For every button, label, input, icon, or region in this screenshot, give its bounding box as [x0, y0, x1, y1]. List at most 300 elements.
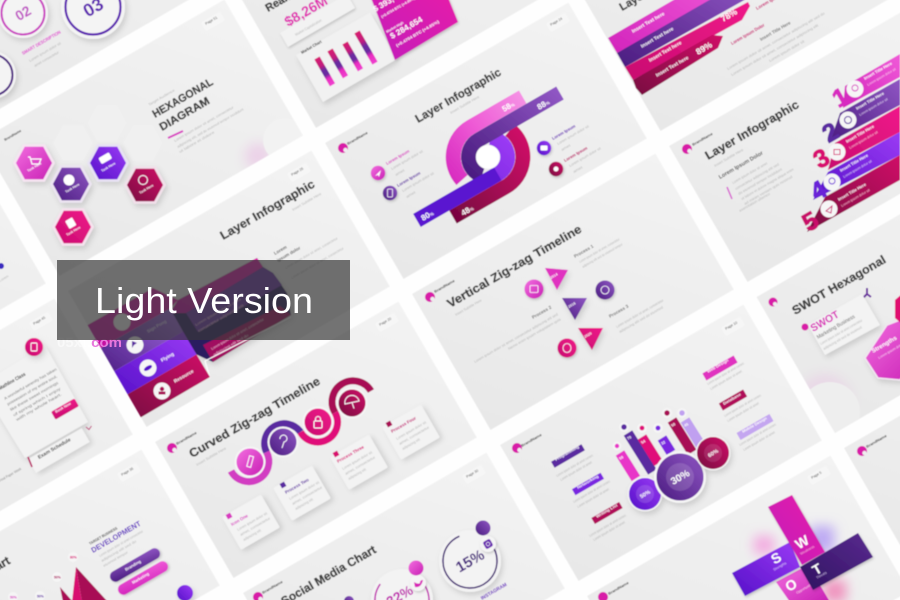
card: process two: Lorem ipsum dolor sit	[288, 480, 320, 501]
band 3: Insert Title Here	[845, 123, 875, 144]
process 2: Lorem ipsum dolor sit amet, consectetur adipiscing elit sed	[474, 312, 559, 364]
pill: branding: Branding	[124, 558, 142, 572]
band 5: 5	[797, 206, 824, 237]
layer arrows: Insert Text here	[648, 40, 683, 64]
icon: pink circle	[524, 280, 544, 298]
section text: consectetur adipiscing elit sed	[734, 162, 780, 191]
bar chart: 32	[660, 440, 666, 446]
card: process three: amet, consectetur	[344, 455, 377, 476]
ring decoration	[799, 374, 860, 442]
stat card: Market Capitalization	[294, 18, 322, 37]
page label	[117, 463, 141, 482]
heading: DIAGRAM	[158, 95, 212, 134]
row: flying	[140, 351, 175, 376]
corner circle	[243, 141, 268, 166]
label: networking: Networking	[576, 474, 600, 490]
title: Vertical Zig-zag Timeline	[444, 222, 584, 311]
title: Curved Zig-zag Timeline	[186, 374, 323, 461]
logo	[857, 434, 887, 456]
exam schedule card	[28, 428, 90, 473]
panel: central layer infographic slide	[325, 2, 647, 279]
card: icon one	[222, 494, 280, 550]
circle 30%: 30%	[669, 468, 692, 488]
card: icon one: Icon One	[230, 513, 249, 527]
text block: ipsum dolor	[276, 245, 301, 263]
label: web design: Web Design	[706, 358, 730, 374]
left legend: Lorem ipsum dolor sit	[402, 171, 435, 193]
band 4: 4	[805, 175, 832, 206]
logo	[768, 298, 778, 306]
circle 60%: 60%	[707, 448, 720, 459]
right legend: amet	[560, 143, 571, 152]
page label	[287, 163, 311, 182]
hexagon: next	[895, 294, 900, 324]
magenta price card: Market High	[386, 21, 404, 34]
card: icon one: amet, consectetur	[240, 516, 272, 537]
panel: swot cross slide	[587, 456, 900, 600]
card: process four: adipiscing elit	[402, 437, 421, 451]
layer arrows: 78%	[719, 6, 739, 24]
side text: Lorem Ipsum Dolor	[730, 22, 766, 46]
label: database: Lorem ipsum dolor sit amet consec	[724, 393, 762, 418]
stacked shape	[84, 258, 291, 419]
logo: BrandName	[4, 129, 22, 142]
hexagon: clock	[126, 168, 164, 202]
panel: swot hexagonal slide	[756, 156, 900, 442]
card: icon one: Lorem ipsum dolor sit	[236, 511, 268, 532]
page label	[807, 466, 831, 485]
card: process four: Lorem ipsum dolor sit	[396, 420, 427, 441]
class card: like these sweet mornings	[10, 381, 59, 412]
ring values: 48%	[460, 203, 475, 218]
process 3: adipiscing elit sed do eiusmod	[618, 305, 664, 334]
logo	[598, 581, 629, 600]
row: resource: Resource	[173, 368, 195, 385]
label: web design	[702, 356, 745, 391]
title: Layer Infographic	[218, 177, 317, 243]
logo: BrandName	[866, 434, 887, 449]
subtitle: Insert Subtitle Here	[292, 192, 322, 212]
label: writing list: Lorem ipsum dolor sit amet consec	[588, 513, 627, 538]
card: process three: adipiscing elit	[348, 467, 367, 481]
text block: Lorem ipsum dolor sit amet, consectetur	[284, 236, 339, 270]
circle left	[0, 51, 16, 99]
triangle 2014	[545, 268, 568, 290]
section text: Lorem Ipsum Dolor	[718, 150, 765, 181]
logo: BrandName	[176, 431, 197, 446]
hexagon: cart: Task Here	[26, 161, 42, 173]
page label: Page 5	[810, 471, 822, 480]
card: process four	[382, 404, 440, 460]
band 5: Insert Title Here	[837, 181, 867, 202]
smart description text: SMART DESCRIPTION	[21, 29, 62, 56]
hexagon: strengths	[865, 318, 900, 380]
page label: Page 51	[204, 16, 218, 26]
icon: crimson circle	[558, 338, 576, 358]
label: networking: Lorem ipsum dolor sit amet	[576, 487, 610, 509]
pyramids	[60, 567, 108, 600]
description: ut labore et dolore	[178, 130, 215, 154]
label: networking: Lorem ipsum dolor sit amet consec	[572, 479, 611, 504]
card: process three: Lorem ipsum dolor sit	[342, 450, 373, 471]
chevron	[86, 426, 92, 430]
logo	[425, 279, 455, 302]
panel caption: Lorem ipsum dolor sit amet, consectetur	[210, 317, 265, 351]
icon: purple mark	[863, 288, 871, 298]
glows	[754, 526, 846, 600]
swot card: adipiscing elit sed do eiusmod	[822, 325, 863, 351]
text block: Lorem ipsum dolor sit amet, consectetur	[290, 246, 345, 280]
right legend: Lorem Ipsum	[551, 123, 577, 141]
pill: branding	[108, 546, 162, 584]
logo: BrandName	[262, 580, 283, 595]
band 3: Lorem ipsum dolor sit	[848, 130, 879, 150]
market chart card: Market Chart	[300, 39, 323, 55]
subtitle: Insert Subtitle Here	[714, 148, 744, 168]
label: writing list: Lorem ipsum dolor sit amet	[592, 520, 626, 542]
swot band: strengths	[732, 542, 800, 596]
label: web design: Lorem ipsum dolor sit amet	[710, 369, 743, 391]
side text: Insert Title Here	[759, 20, 792, 42]
band 4: Insert Title Here	[839, 152, 869, 173]
logo: BrandName	[434, 279, 455, 294]
ball	[177, 585, 193, 600]
left legend: Lorem Ipsum	[385, 148, 411, 166]
icon: purple circle	[596, 280, 614, 300]
page label	[721, 317, 745, 336]
ring values: 88%	[536, 97, 551, 112]
card: process four: Process Four	[390, 415, 417, 434]
instagram gauge: 15%	[453, 547, 488, 576]
panel: blank branded slide	[844, 308, 900, 584]
triangle 2020	[578, 328, 603, 350]
circle 30%	[654, 451, 706, 503]
panel: numbered circles slide	[0, 0, 188, 109]
logo	[512, 433, 542, 453]
circle 60%	[696, 436, 730, 470]
swot band: strengths: S	[768, 549, 784, 567]
page label: Page 20	[378, 317, 392, 327]
class card: with my whole heart.	[16, 392, 63, 422]
panel: curved zig-zag timeline slide	[155, 302, 477, 578]
band 3	[808, 106, 900, 174]
label: mobile design	[737, 414, 777, 452]
band 2	[817, 79, 900, 148]
process 1: adipiscing elit sed do eiusmod tempor	[582, 242, 624, 269]
hexagon: strengths: Strengths	[871, 335, 899, 355]
section text: ad minim veniam quis nostrud	[744, 175, 793, 206]
page label	[29, 312, 53, 331]
step 1 icon	[234, 446, 266, 478]
market chart card	[296, 12, 397, 102]
panel caption: consectetur adipiscing elit	[198, 303, 245, 333]
panel: hexagonal diagram slide	[0, 0, 307, 276]
button: Book Now	[54, 402, 72, 414]
magenta price card	[368, 0, 458, 60]
section text: exercitation ullamco	[738, 192, 771, 213]
triangle 2020: 2020	[584, 331, 592, 339]
panel: development chart slide	[0, 450, 220, 600]
panel: numbered layer infographic slide	[669, 6, 900, 282]
right legend: Lorem Ipsum	[563, 145, 589, 163]
swot band: weaknesses	[768, 495, 825, 565]
class card: possession of my entire soul,	[6, 374, 58, 406]
description: Lorem ipsum dolor sit amet, consectetur	[174, 105, 235, 143]
section text: Lorem ipsum dolor sit amet	[732, 161, 768, 185]
pyramid values: 50%	[10, 596, 17, 600]
pyramid values: 50%	[54, 576, 61, 580]
panel: layer infographic stack slide	[68, 150, 390, 427]
band 3: 3	[808, 143, 835, 174]
logo: BrandName	[692, 132, 713, 147]
section text: do eiusmod tempor incididunt	[738, 167, 783, 196]
circle 02	[0, 0, 48, 38]
pyramid values	[8, 552, 78, 600]
label: database: Lorem ipsum dolor sit amet	[726, 401, 760, 423]
stat card	[280, 0, 355, 47]
text block: Lorem	[273, 245, 288, 256]
label: database: Database	[722, 392, 742, 406]
side text	[726, 0, 825, 77]
band 5	[797, 155, 900, 237]
heading: eiusmod tempor	[102, 550, 129, 568]
panel: arrow layers slide	[582, 0, 900, 131]
circle 02: 02	[12, 2, 34, 24]
pyramid values: 50%	[37, 594, 44, 598]
pill: marketing	[116, 559, 170, 597]
card: process two: amet, consectetur	[292, 485, 324, 506]
banner: light version	[57, 260, 350, 340]
icon card	[0, 262, 8, 282]
ring values: 58%	[500, 99, 516, 114]
smart description text: amet consectetur	[34, 50, 60, 68]
triangle 2016: 2016	[568, 301, 576, 309]
bar chart: 59	[618, 455, 624, 461]
accent line	[727, 187, 732, 199]
step 2 icon	[268, 426, 298, 458]
step 4 icon	[336, 388, 368, 418]
bar chart: 54	[640, 439, 647, 445]
label: web design: Lorem ipsum dolor sit amet consec	[706, 361, 745, 386]
swot band: opportunities: Opportunity	[796, 582, 813, 595]
page label: Page 36	[120, 467, 134, 477]
left legend: amet	[394, 168, 405, 177]
process 2: Nemo enim ipsam voluptatem quia	[508, 317, 561, 351]
right legend: Lorem ipsum dolor sit	[568, 146, 602, 168]
hexagon: chat: Task Here	[100, 161, 116, 173]
swot band: weaknesses: Weakness	[800, 544, 815, 556]
left legend: Lorem Ipsum	[396, 170, 422, 188]
heading: Lorem ipsum dolor sit amet consectetur	[98, 529, 144, 558]
page label: Page 10	[724, 321, 738, 331]
text block	[273, 236, 345, 280]
swot band: threats: T	[809, 560, 825, 578]
panel: data chart slide	[500, 304, 822, 581]
process 3: Process 3	[608, 303, 630, 319]
accent line	[168, 131, 183, 138]
class card: of spring which I enjoy	[12, 387, 61, 417]
swot card	[802, 294, 880, 355]
band 4: Lorem ipsum dolor sit	[842, 159, 873, 179]
label: database	[719, 390, 762, 423]
title: SWOT Hexagonal	[790, 252, 888, 318]
hexagon: pie	[52, 166, 90, 202]
layer arrows: Insert Text here	[655, 55, 690, 79]
subtitle: Insert Subtitle Here	[450, 95, 480, 115]
card: icon one: adipiscing elit	[242, 528, 262, 542]
left legend	[371, 148, 435, 200]
label: mobile design: Lorem ipsum dolor sit amet	[742, 430, 776, 452]
magenta price card: (+0.4704 BTC (+4.85%)	[395, 19, 441, 48]
ring values: 80%	[420, 208, 435, 223]
panel: class schedule slide	[0, 298, 133, 575]
triangle 2016	[562, 298, 587, 320]
logo	[338, 131, 368, 153]
heading: adipiscing elit sed do	[100, 539, 137, 563]
card: process two: adipiscing elit	[294, 497, 314, 511]
section text	[718, 150, 794, 213]
label: mobile design: Lorem ipsum dolor sit amet consec	[738, 422, 777, 447]
wave track	[231, 381, 371, 482]
left legend: amet	[406, 190, 416, 199]
card: process three: Process Three	[336, 444, 365, 464]
triangle 2014: 2014	[550, 272, 558, 280]
class card: A wonderful serenity has taken	[4, 367, 57, 401]
subtitle: Insert Subtitle Here	[454, 298, 482, 317]
label: programming	[551, 444, 594, 482]
panel caption	[194, 297, 265, 357]
instagram gauge	[432, 520, 508, 599]
card: process two: Process Two	[284, 477, 310, 495]
page label: Page 26	[290, 167, 304, 177]
layer arrows: 89%	[694, 39, 714, 57]
band 4	[805, 132, 900, 206]
label: writing list	[588, 502, 627, 542]
magenta price card: $ 284,654	[388, 15, 425, 41]
smart description text: Lorem ipsum dolor sit	[28, 41, 62, 63]
process 1: Lorem ipsum dolor sit amet, consectetur	[578, 237, 621, 264]
right legend: amet	[572, 165, 583, 174]
heading: DEVELOPMENT	[90, 519, 143, 555]
label: programming: Programming	[554, 445, 581, 462]
twitter gauge	[365, 560, 439, 600]
swot band: strengths: Strengths	[772, 561, 787, 572]
row: resource	[154, 368, 195, 400]
logo: BrandName	[608, 581, 629, 596]
circle 50%: 50%	[639, 489, 652, 500]
page label	[375, 313, 399, 332]
hexagon: chat	[88, 146, 128, 180]
heading: HEXAGONAL	[150, 76, 216, 121]
band 1: Lorem ipsum dolor sit	[866, 67, 897, 87]
circle 50%	[628, 476, 662, 512]
process 3	[608, 298, 665, 334]
swot band: threats: Threats	[816, 571, 828, 580]
bar chart: 45	[684, 422, 689, 428]
card: process four: amet, consectetur	[398, 425, 431, 446]
swot band: opportunities: O	[782, 575, 800, 595]
layer arrows: Insert Text here	[640, 26, 675, 50]
bar chart: 70	[626, 435, 632, 441]
side text: Lorem ipsum dolor sit amet, consectetur adipiscing elit	[730, 23, 819, 77]
label: mobile design: Mobile Design	[742, 416, 768, 434]
side text: Lorem ipsum dolor sit amet, consectetur adipiscing elit sed do	[726, 11, 825, 71]
step 3 icon	[302, 406, 334, 438]
exam schedule card: Exam Schedule	[37, 437, 72, 461]
label: programming: Lorem ipsum dolor sit amet consec	[556, 453, 594, 478]
banner: light version: Light Version	[95, 280, 313, 321]
swot band: threats	[800, 533, 873, 590]
logo: BrandName	[346, 131, 368, 146]
logo	[167, 431, 197, 453]
logo: BrandName	[520, 433, 542, 448]
class card	[0, 338, 88, 458]
pill: marketing: Marketing	[131, 571, 150, 585]
card: process three	[330, 434, 388, 490]
swot band: opportunities	[776, 565, 830, 600]
ball small	[344, 596, 354, 600]
subtitle: Insert Subtitle Here	[196, 446, 227, 467]
left legend: Lorem ipsum dolor sit	[390, 149, 424, 171]
ghost hexagons	[53, 105, 163, 161]
panel: realtime chart slide	[238, 0, 559, 128]
title: Layer Infographic	[702, 97, 802, 163]
heading	[148, 79, 214, 132]
icon: instagram	[480, 536, 496, 552]
bar chart	[616, 417, 706, 481]
heading: TARGET BUSINESS	[88, 526, 119, 546]
icon: badge	[25, 338, 43, 356]
swot card: SWOT	[808, 308, 842, 335]
circle 03	[61, 0, 125, 39]
band 1: Insert Title Here	[863, 60, 893, 81]
hexagon: pie: Task Here	[64, 182, 80, 194]
band 1: 1	[827, 82, 854, 113]
stacked bars	[314, 30, 378, 86]
row: sign pong	[126, 319, 168, 354]
panel: vertical zig-zag timeline slide	[412, 154, 734, 430]
process 1: Process 1	[573, 243, 595, 259]
page label: Page 30	[466, 469, 479, 479]
page label: Page 24	[550, 17, 563, 27]
hexagon: cart	[14, 146, 54, 180]
smart description text	[21, 29, 62, 68]
logo	[253, 580, 283, 600]
panel caption: adipiscing elit sed do	[212, 333, 249, 357]
watermark: 05xt.com	[57, 334, 122, 350]
layered ring chart	[417, 93, 560, 220]
bar chart: 50	[670, 422, 676, 428]
icon: twitter	[410, 575, 426, 591]
label: networking	[572, 473, 611, 509]
band 2: 2	[817, 117, 844, 148]
side text: Lorem ipsum dolor sit	[768, 39, 805, 63]
swot band: weaknesses: W	[792, 531, 812, 552]
band 1	[827, 54, 900, 113]
process 3: Lorem ipsum dolor sit amet, consectetur	[616, 298, 665, 329]
bar icons	[612, 408, 687, 450]
band 2: Lorem ipsum dolor sit	[858, 97, 889, 117]
pyramid values: 80%	[70, 556, 77, 560]
row: sign pong: Sign Pong	[146, 319, 168, 334]
panel: social media chart slide	[243, 452, 565, 600]
page label: Page 45	[32, 316, 46, 326]
label: programming: Lorem ipsum dolor sit amet	[560, 460, 593, 482]
layer arrows	[608, 0, 755, 95]
row: flying: Flying	[160, 351, 175, 364]
ring values	[420, 97, 551, 223]
title: Layer Infographic	[414, 66, 504, 126]
